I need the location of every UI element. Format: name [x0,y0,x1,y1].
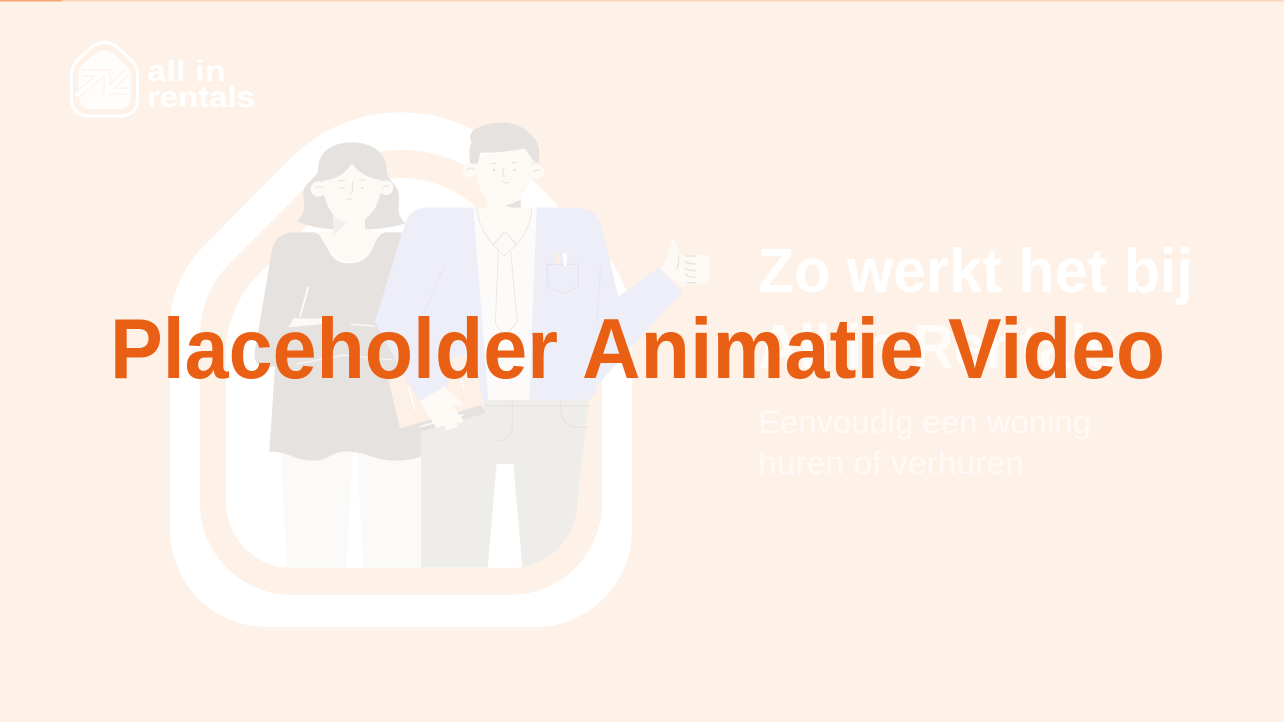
background heading: Zo werkt het bij [758,237,1193,306]
background heading: All in Rentals [758,313,1118,382]
book [388,352,486,437]
background subtitle [758,404,1091,481]
illustration: two people [255,122,709,568]
logo: All in Rentals [72,42,255,116]
icon: logo house [72,42,138,116]
logo wordmark: all in [147,55,226,88]
title: placeholder [110,302,1165,397]
title: placeholder: Placeholder [110,302,558,397]
title: placeholder: Animatie [582,302,924,397]
woman [255,142,427,568]
background subtitle: Eenvoudig een woning [758,404,1091,440]
progress bar [0,0,1284,2]
man [375,122,709,568]
icon: large house rings [170,112,632,627]
title: placeholder: Video [948,302,1165,397]
logo wordmark [147,55,255,114]
hands [420,239,709,431]
logo wordmark: rentals [147,81,255,114]
background subtitle: huren of verhuren [758,445,1024,481]
background heading [758,237,1193,382]
